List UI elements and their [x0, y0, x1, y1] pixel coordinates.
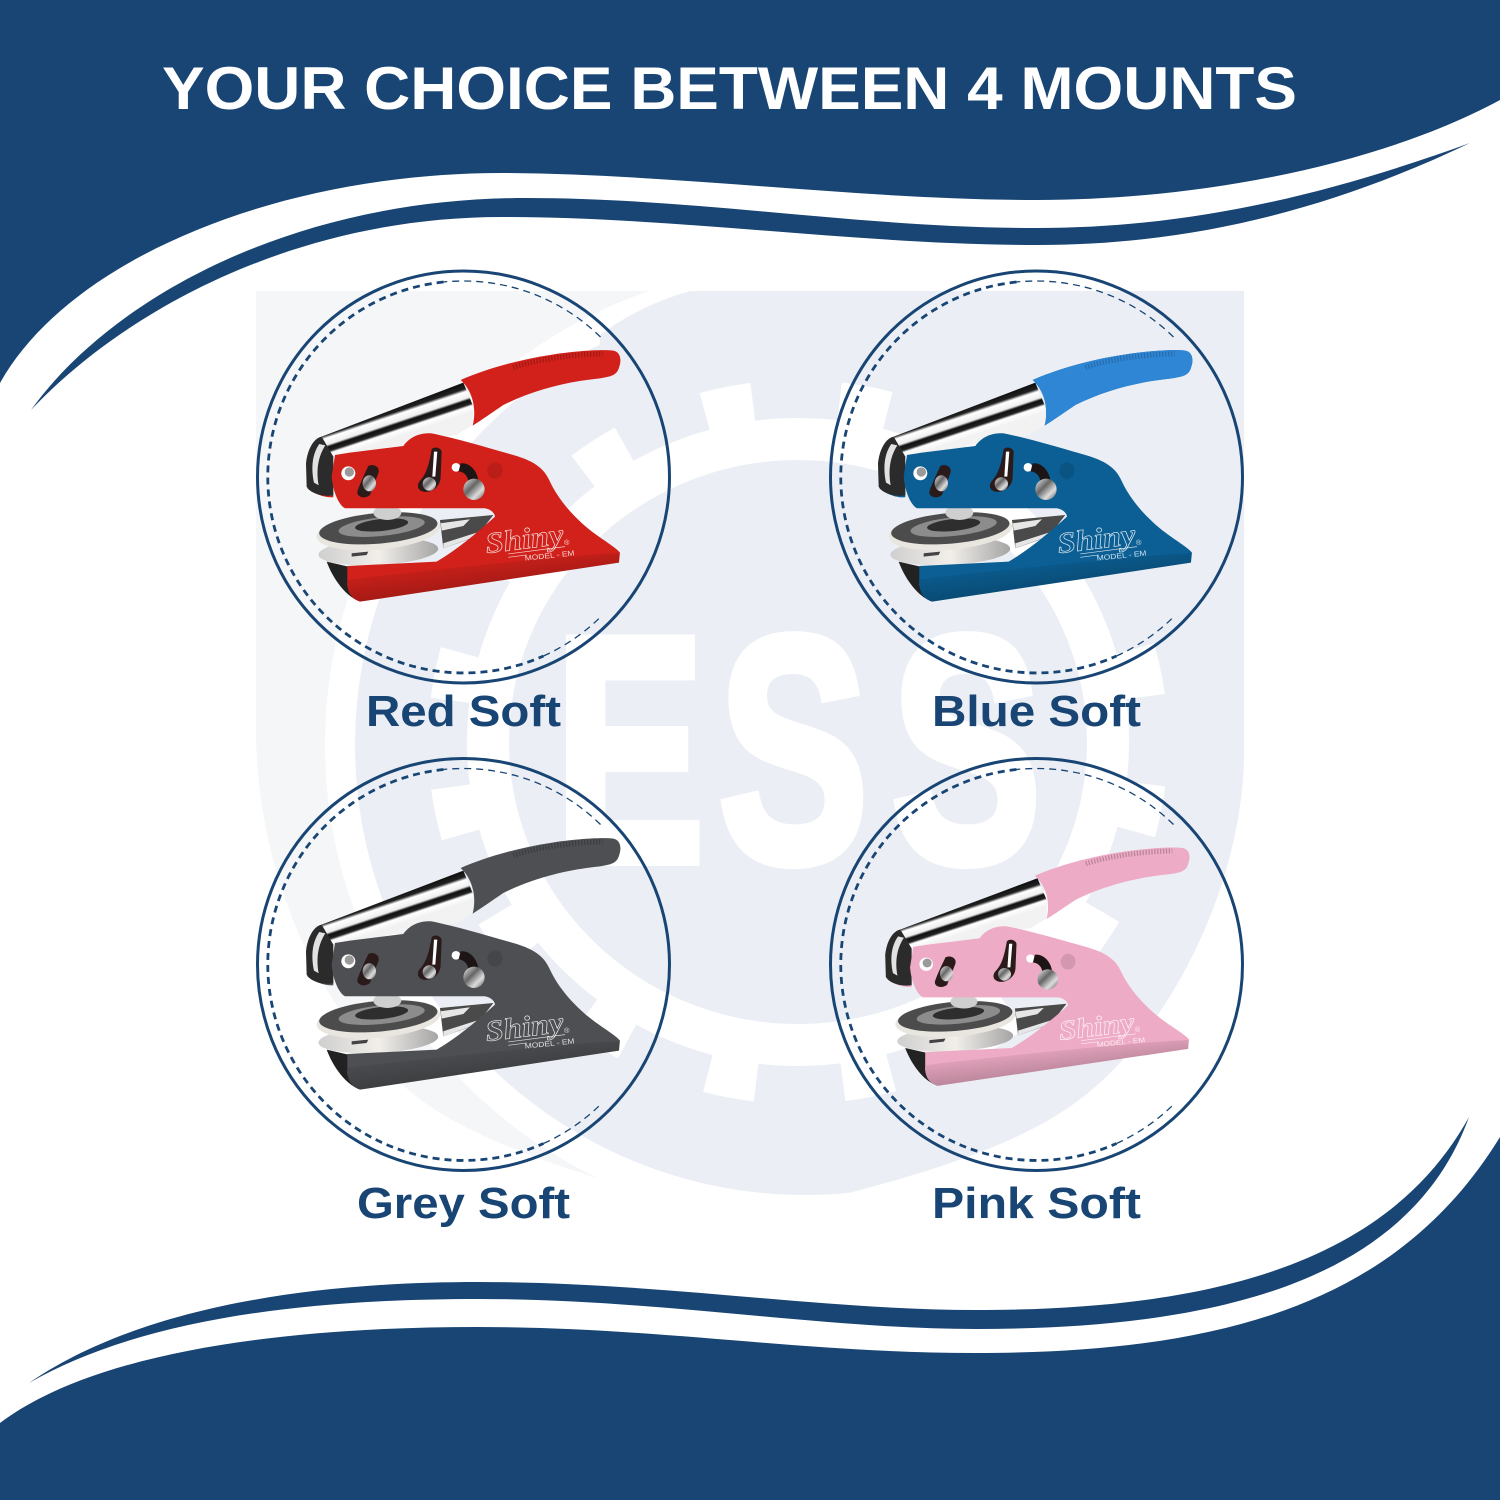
- icon: red embosser: MODEL - EM: [524, 548, 575, 563]
- icon: blue embosser: MODEL - EM: [1096, 548, 1147, 563]
- badge ring: blue: [830, 271, 1242, 683]
- watermark: ESS shield logo: [256, 291, 1244, 1195]
- label: blue soft: Blue Soft: [932, 687, 1141, 736]
- icon: grey embosser: [306, 838, 620, 1090]
- badge ring: red: [258, 271, 670, 683]
- icon: pink embosser: [885, 847, 1190, 1086]
- panel: red soft: [258, 271, 670, 736]
- label: grey soft: Grey Soft: [357, 1179, 570, 1228]
- icon: pink embosser: Shiny: [1057, 1007, 1137, 1047]
- icon: grey embosser: ®: [564, 1026, 570, 1035]
- label: red soft: Red Soft: [366, 687, 561, 736]
- panel: pink soft: [830, 758, 1242, 1228]
- watermark: ESS shield logo: ESS: [554, 569, 1041, 929]
- icon: grey embosser: MODEL - EM: [524, 1036, 575, 1051]
- icon: pink embosser: ®: [1135, 1026, 1141, 1034]
- icon: grey embosser: Shiny: [484, 1007, 566, 1048]
- icon: red embosser: Shiny: [484, 519, 566, 560]
- title: YOUR CHOICE BETWEEN 4 MOUNTS: [162, 55, 1297, 122]
- icon: blue embosser: Shiny: [1056, 519, 1138, 560]
- panel: grey soft: [258, 758, 670, 1228]
- top header wave: [0, 0, 1500, 410]
- panel: blue soft: [830, 271, 1242, 736]
- icon: blue embosser: [878, 350, 1192, 602]
- icon: red embosser: [306, 350, 620, 602]
- icon: red embosser: ®: [564, 538, 570, 547]
- label: pink soft: Pink Soft: [932, 1179, 1141, 1228]
- icon: blue embosser: ®: [1136, 538, 1142, 547]
- icon: pink embosser: MODEL - EM: [1097, 1037, 1146, 1049]
- bottom footer wave: [0, 1117, 1500, 1500]
- badge ring: grey: [258, 758, 670, 1170]
- badge ring: pink: [830, 758, 1242, 1170]
